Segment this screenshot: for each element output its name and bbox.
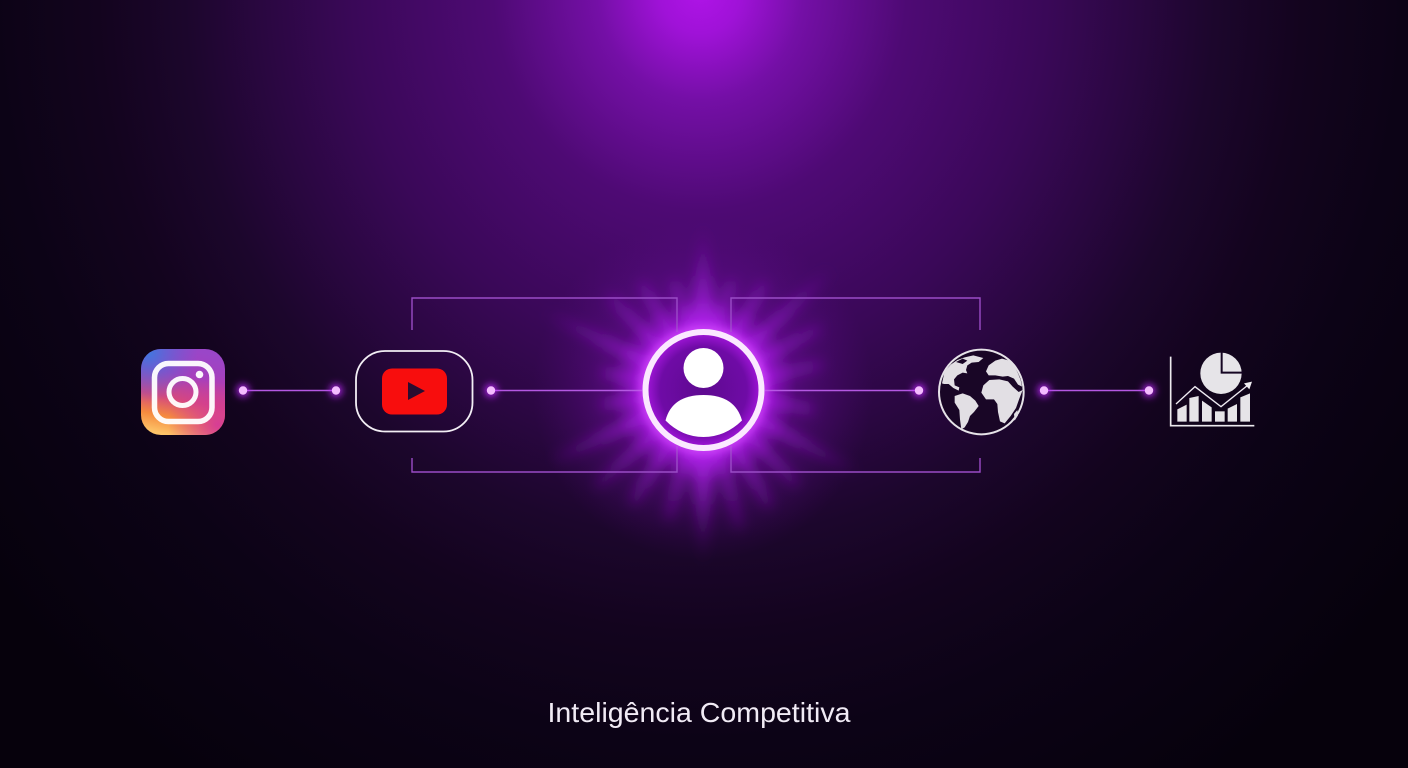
central user glow ring	[646, 332, 762, 448]
connector lines	[243, 390, 1149, 392]
light rays	[550, 225, 853, 570]
central glow	[533, 220, 873, 560]
caption: Inteligência Competitiva	[548, 697, 851, 728]
connector dots	[237, 384, 1155, 396]
icon: analytics chart	[1171, 352, 1254, 426]
icon: YouTube	[356, 351, 472, 432]
bracket connectors	[412, 298, 980, 472]
icon: central user	[646, 332, 762, 448]
icon: Instagram	[141, 349, 225, 435]
icon: globe	[939, 350, 1024, 434]
